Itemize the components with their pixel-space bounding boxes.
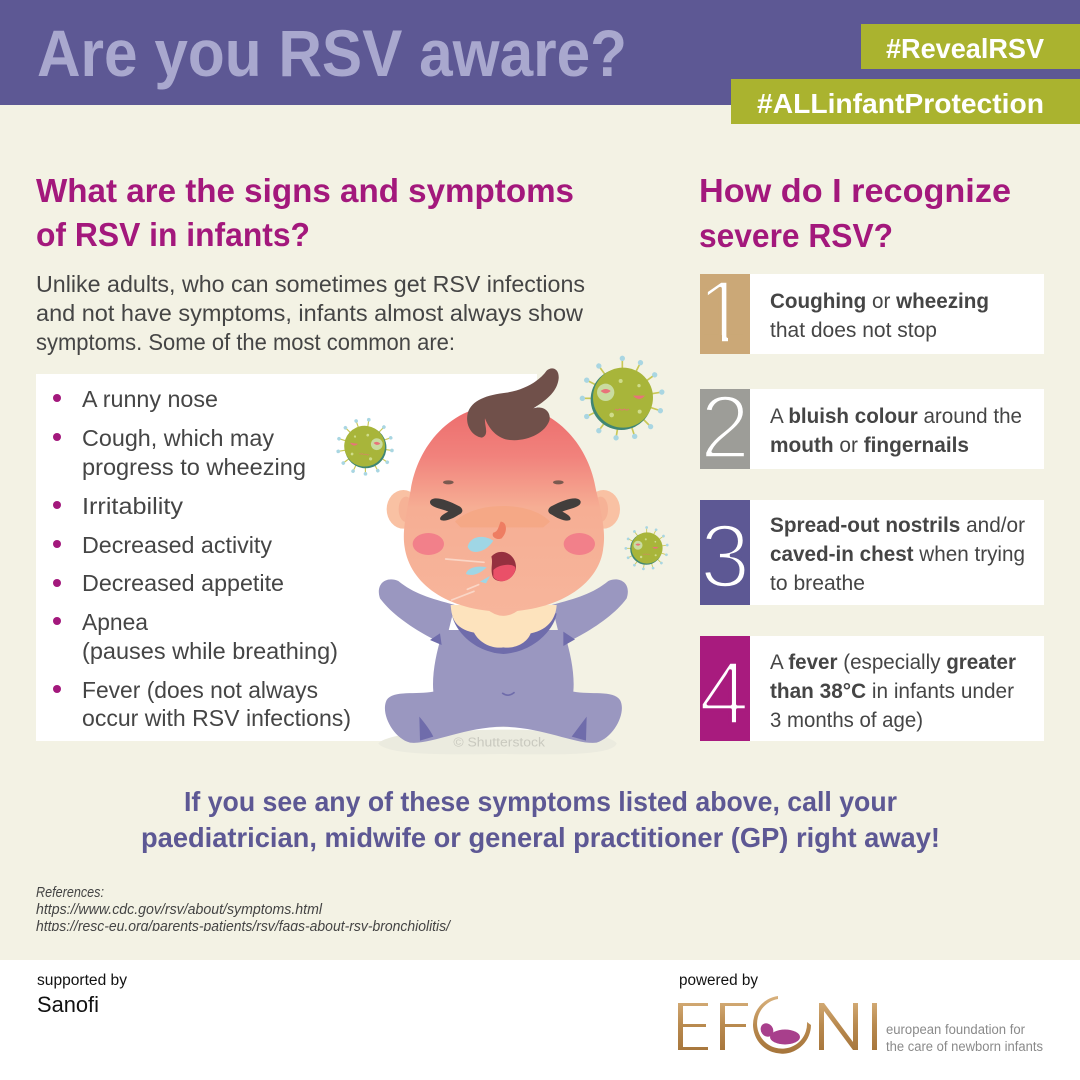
call to action <box>141 786 940 853</box>
bib <box>451 605 557 648</box>
hashtag: RevealRSV: #RevealRSV <box>886 33 1044 64</box>
bullet points <box>53 394 61 693</box>
breath lines <box>446 559 484 600</box>
intro paragraph: symptoms. Some of the most common are: <box>36 329 455 355</box>
illustration: sick baby with viruses <box>332 356 669 754</box>
card 2: bluish colour: A bluish colour around the <box>770 404 1022 428</box>
foot shading <box>419 632 587 741</box>
arms <box>379 579 628 645</box>
footer <box>0 960 1080 1080</box>
torso and legs <box>385 630 622 743</box>
list text: Irritability <box>82 493 184 519</box>
supported by <box>37 972 127 1017</box>
mouth <box>491 552 516 581</box>
card 4: fever: 3 months of age) <box>770 708 923 732</box>
intro paragraph: and not have symptoms, infants almost always show <box>36 300 583 326</box>
references <box>36 886 452 931</box>
heading: signs and symptoms <box>36 172 574 253</box>
references: References: <box>36 885 104 901</box>
nose wrinkle <box>455 506 550 527</box>
logo: EFCNI <box>678 996 1043 1054</box>
list text: progress to wheezing <box>82 454 306 480</box>
supported by: Sanofi <box>37 992 99 1017</box>
logo tagline: the care of newborn infants <box>886 1039 1043 1054</box>
call to action: paediatrician, midwife or general practitioner (GP) right away! <box>141 822 940 853</box>
heading: signs and symptoms: What are the signs and symptoms <box>36 172 574 209</box>
head <box>404 404 604 612</box>
list text: Decreased activity <box>82 532 272 558</box>
list text: occur with RSV infections) <box>82 705 351 731</box>
card 4: fever: A fever (especially greater <box>770 650 1017 674</box>
hashtag: RevealRSV <box>861 24 1080 69</box>
card 1: coughing: that does not stop <box>770 318 937 342</box>
list text <box>82 386 351 731</box>
logo letters <box>678 996 877 1054</box>
title: Are you RSV aware? <box>37 16 627 90</box>
chin <box>486 608 521 616</box>
card 3: nostrils and chest: 3 <box>700 507 750 607</box>
hashtag: ALLinfantProtection <box>731 79 1080 124</box>
eyebrows <box>443 480 564 484</box>
references: https://resc-eu.org/parents-patients/rsv/faqs-about-rsv-bronchiolitis/ <box>36 919 452 935</box>
intro paragraph <box>36 271 585 355</box>
logo baby <box>758 1021 800 1044</box>
squeezed eyes <box>430 498 581 521</box>
logo tagline: european foundation for <box>886 1022 1025 1037</box>
collar <box>452 613 557 654</box>
heading: severe RSV: How do I recognize <box>699 172 1011 209</box>
cheeks <box>413 533 595 555</box>
card 1: coughing: Coughing or wheezing <box>770 289 989 313</box>
nose <box>493 522 506 539</box>
card 2: bluish colour <box>700 378 1044 478</box>
card 3: nostrils and chest: caved-in chest when trying <box>770 542 1025 566</box>
supported by: supported by <box>37 972 127 989</box>
card 2: bluish colour: mouth or fingernails <box>770 433 969 457</box>
card 4: fever: than 38°C in infants under <box>770 679 1014 703</box>
powered by: powered by <box>679 972 758 989</box>
ears <box>387 490 620 529</box>
card 4: fever <box>699 636 1044 744</box>
heading: severe RSV: severe RSV? <box>699 217 893 254</box>
list text: (pauses while breathing) <box>82 638 338 664</box>
belly button <box>503 693 514 695</box>
ground shadow <box>378 726 617 754</box>
heading: signs and symptoms: of RSV in infants? <box>36 216 310 253</box>
card 3: nostrils and chest <box>700 500 1044 607</box>
list text: Apnea <box>82 609 148 635</box>
list text: Cough, which may <box>82 425 275 451</box>
card 3: nostrils and chest: to breathe <box>770 571 865 595</box>
hair <box>467 368 559 440</box>
list text: Decreased appetite <box>82 570 284 596</box>
references: https://www.cdc.gov/rsv/about/symptoms.html <box>36 902 323 918</box>
header banner <box>0 0 1080 105</box>
logo tagline <box>886 1022 1043 1054</box>
virus: left <box>332 414 398 479</box>
call to action: If you see any of these symptoms listed above, call your <box>184 786 897 817</box>
list text: A runny nose <box>82 386 218 412</box>
card 3: nostrils and chest: Spread-out nostrils and/or <box>770 513 1025 537</box>
card 2: bluish colour: 2 <box>700 378 750 478</box>
virus: top right <box>580 356 665 441</box>
heading: severe RSV <box>699 172 1011 254</box>
watermark: © Shutterstock <box>453 736 546 750</box>
card 1: coughing: 1 <box>697 263 748 363</box>
card 1: coughing <box>700 274 1044 354</box>
intro paragraph: Unlike adults, who can sometimes get RSV infections <box>36 271 585 297</box>
runny snot and droplets <box>466 537 493 583</box>
hashtag: ALLinfantProtection: #ALLinfantProtection <box>757 88 1044 119</box>
panel: symptom list <box>36 374 537 741</box>
card 4: fever: 4 <box>699 644 749 744</box>
virus: small right <box>624 526 669 570</box>
list text: Fever (does not always <box>82 677 318 703</box>
